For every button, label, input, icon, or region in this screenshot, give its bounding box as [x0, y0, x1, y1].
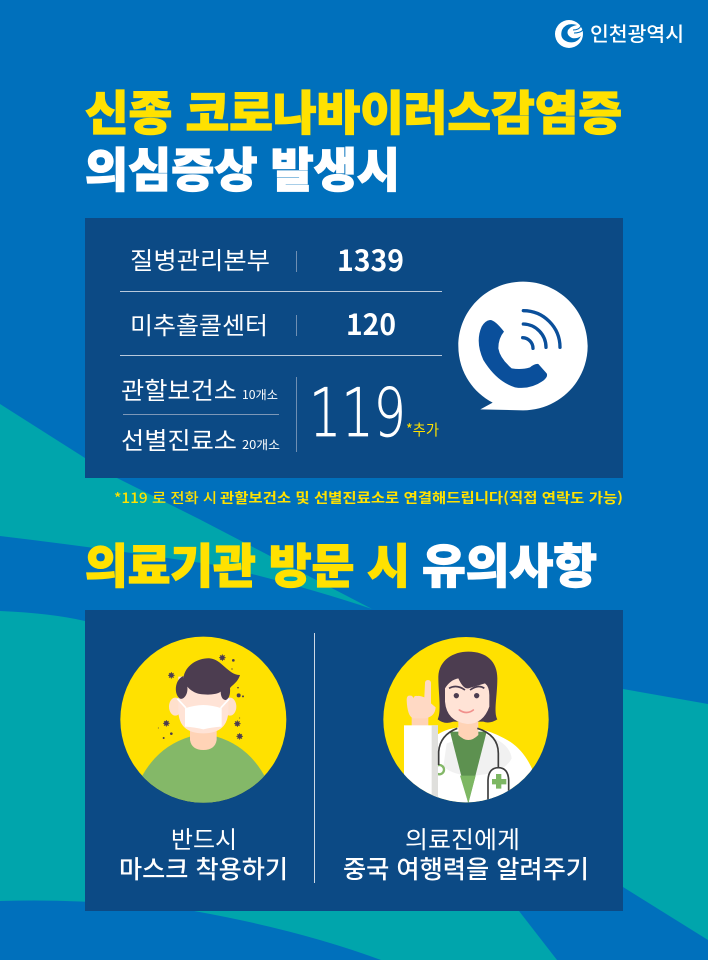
row: KCDC 1339: 질병관리본부 — [130, 241, 270, 276]
heading: hospital visit precautions: 의료기관 방문 시 — [85, 528, 410, 597]
panel: precautions — [85, 610, 623, 911]
added note: *추가 — [406, 419, 439, 440]
title line 1: 신종 코로나바이러스감염증 — [85, 75, 622, 144]
row: KCDC 1339 — [130, 238, 404, 280]
icon: phone speech bubble — [458, 282, 588, 410]
row: screening clinics: 선별진료소 — [121, 421, 237, 456]
text: tell staff about China travel: 중국 여행력을 알려주기 — [343, 850, 589, 886]
icon: swirl emblem — [555, 20, 583, 48]
logo: Incheon city — [555, 18, 684, 48]
text: tell staff about China travel: 의료진에게 — [405, 820, 520, 855]
footnote: *119 로 전화 시 — [114, 488, 217, 508]
icon: doctor pointing up — [383, 637, 549, 807]
icon: person with mask — [120, 637, 286, 807]
row: health centers: 10개소 — [242, 386, 278, 403]
heading: hospital visit precautions — [85, 528, 597, 597]
logo wordmark: 인천광역시 — [590, 18, 684, 47]
text: tell staff about China travel — [343, 820, 589, 886]
row: Michuhol call center 120: 미추홀콜센터 — [130, 306, 268, 341]
row: screening clinics: 20개소 — [242, 436, 280, 453]
footnote: 관할보건소 및 선별진료소로 연결해드립니다(직접 연락도 가능) — [220, 488, 623, 508]
text: wear a mask: 반드시 — [171, 820, 237, 855]
row: Michuhol call center 120: 120 — [346, 302, 396, 344]
title — [85, 75, 622, 201]
panel: contact numbers — [85, 218, 623, 478]
title line 2: 의심증상 발생시 — [85, 132, 400, 201]
row: Michuhol call center 120 — [130, 302, 396, 344]
text: wear a mask: 마스크 착용하기 — [119, 850, 288, 886]
heading: hospital visit precautions: 유의사항 — [422, 528, 597, 597]
number 119: 119 — [309, 374, 406, 452]
text: wear a mask — [119, 820, 288, 886]
row: screening clinics — [121, 421, 280, 456]
row: health centers: 관할보건소 — [121, 371, 237, 406]
row: KCDC 1339: 1339 — [337, 238, 404, 280]
